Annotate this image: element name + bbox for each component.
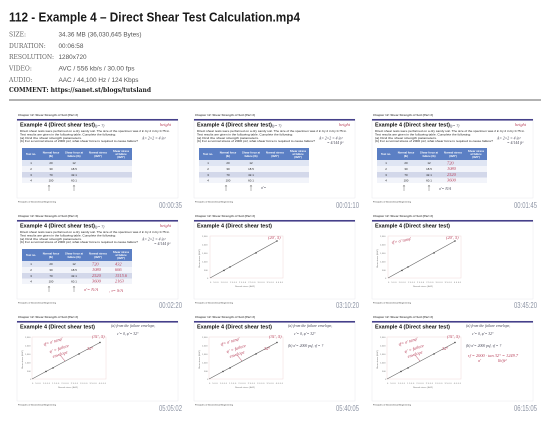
thumbnail 4: completed table: (lb) [49,255,53,259]
thumbnail 8: chart with envelope and part b: 0 500 1000 1500 2000 2500 3000 3500 4000 [209,383,284,385]
thumbnail 3: table with normal stress notes: 18.5 [426,167,432,171]
thumbnail 1: table, blank columns: 00:00:35 [159,201,182,210]
thumbnail 8: chart with envelope and part b: Normal stress (lb/ft²) [235,386,255,389]
thumbnail 1: table, blank columns: (a) Find the shear strength parameters. [20,136,82,140]
thumbnail 8: chart with envelope and part b: 2,000 [202,346,208,348]
thumbnail 4: completed table: 2520 [92,273,102,278]
thumbnail 3: table with normal stress notes: (lb/ft²) [449,154,457,158]
thumbnail 4: completed table: Normal force [43,252,60,256]
thumbnail 5: chart: Chapter 12: Shear Strength of Soil (Part 2) [195,214,255,218]
thumbnail 3: table with normal stress notes: 70 [404,173,408,177]
thumbnail 4: completed table: 42.1 [71,274,77,278]
thumbnail 2: table with first note: 100 [226,178,231,182]
thumbnail 7: chart with envelope: φ' = failure [49,343,69,354]
thumbnail 1: table, blank columns: (γ= ?) [95,124,105,128]
thumbnail 3: table with normal stress notes: 12 [427,161,431,165]
thumbnail 4: completed table: (γ= ?) [95,225,105,229]
thumbnail 3: table with normal stress notes: A= 2×2 = 4 in² [496,136,521,140]
thumbnail 4: completed table: 60.1 [71,280,77,284]
thumbnail 1: table, blank columns: Principles of Geotechnical Engineering [18,200,57,204]
thumbnail 9: chart with final calculation: (a) from the failure envelope, [466,324,510,329]
file metadata: RESOLUTION: [9,54,54,61]
thumbnail 3: table with normal stress notes: σ'= N/A [439,187,452,191]
thumbnail 9: chart with final calculation: c'= 0, φ'= 32° [472,332,494,337]
thumbnail 1: table, blank columns: Normal stress [89,150,107,154]
thumbnail 8: chart with envelope and part b: 1,500 [202,354,208,356]
thumbnail 2: table with first note: Principles of Geotechnical Engineering [195,200,234,204]
thumbnail 4: completed table: height [160,223,172,228]
thumbnail 8: chart with envelope and part b: τf= σ' tanφ' [220,336,240,347]
thumbnail 6: chart: 03:45:20 [514,301,537,310]
thumbnail 2: table with first note: Test results are given in the following table. Complete the following: [197,132,293,136]
thumbnail 8: chart with envelope and part b: Example 4 (Direct shear test) [197,325,272,331]
thumbnail 8: chart with envelope and part b: φ' = failure [226,343,246,354]
thumbnail 2: table with first note: Shear stress [290,149,307,153]
thumbnail 2: table with first note: A= 2×2 = 4 in² [318,136,343,140]
thumbnail 7: chart with envelope: 2,500 [25,337,31,339]
thumbnail 3: table with normal stress notes: 60.1 [426,178,432,182]
thumbnail 4: completed table: Example 4 (Direct shear test) [20,224,95,230]
thumbnail 4: completed table: Shear force at [65,252,83,256]
thumbnail 1: table, blank columns: (lb/ft²) [94,154,102,158]
thumbnail 6: chart: τf= σ' tanφ' [391,236,412,245]
thumbnail 3: table with normal stress notes: (lb) [404,154,408,158]
thumbnail 6: chart: 2,000 [380,244,386,246]
thumbnail 9: chart with final calculation: 0 [385,379,387,381]
thumbnail 6: chart: Shear stress (lb/ft²) [376,249,379,268]
thumbnail 3: table with normal stress notes: Normal force [398,150,415,154]
thumbnail 3: table with normal stress notes: = 4/144 ft² [507,141,524,145]
thumbnail 7: chart with envelope: 05:05:02 [159,404,182,413]
thumbnail 1: table, blank columns: 1 [30,161,32,165]
thumbnail 5: chart: 0 [207,278,209,280]
thumbnail 1: table, blank columns: Shear force at [65,150,83,154]
thumbnail 3: table with normal stress notes: Normal stress [444,150,462,154]
thumbnail 9: chart with final calculation: 2,000 [380,346,386,348]
thumbnail 3: table with normal stress notes: Chapter 12: Shear Strength of Soil (Part 2) [373,113,433,117]
file metadata: 1280x720 [58,54,87,61]
thumbnail 1: table, blank columns [17,113,182,210]
thumbnail 4: completed table: σ'= N/A [84,287,98,292]
thumbnail 3: table with normal stress notes: (b) For a normal stress of 2000 psf, what shear force is required to cause failure? [375,139,493,143]
thumbnail 6: chart: (20', 5) [446,235,459,241]
thumbnail 3: table with normal stress notes: height [515,122,527,127]
thumbnail 7: chart with envelope: 2,000 [25,346,31,348]
thumbnail 6: chart: 0 500 1000 1500 2000 2500 3000 3500 4000 [388,282,462,284]
thumbnail 9: chart with final calculation: (31', 5) [447,334,460,340]
file metadata [8,32,142,84]
thumbnail 1: table, blank columns: Test no. [26,152,36,156]
thumbnail 7: chart with envelope: c'= 0, φ'= 32° [117,332,139,337]
thumbnail 9: chart with final calculation: lb/ft² [498,358,507,363]
thumbnail 2: table with first note: height [339,122,351,127]
thumbnail 3: table with normal stress notes: 1 [385,161,387,165]
thumbnail 9: chart with final calculation: Chapter 12: Shear Strength of Soil (Part 2) [373,315,433,319]
thumbnail 5: chart: 500 [204,270,208,272]
thumbnail 3: table with normal stress notes: 42.1 [426,173,432,177]
thumbnail 8: chart with envelope and part b: c'= 0, φ'= 32° [294,332,316,337]
thumbnail 2: table with first note: at failure [292,152,304,156]
thumbnail 2: table with first note: Normal force [220,150,237,154]
thumbnail 8: chart with envelope and part b: 05:40:05 [336,404,359,413]
thumbnail 2: table with first note: σ'= [261,186,267,190]
thumbnail 6: chart: 0 [385,278,387,280]
file metadata: 00:06:58 [58,43,84,50]
thumbnail 9: chart with final calculation: Shear stress (lb/ft²) [376,350,379,369]
thumbnail 6: chart: 2,500 [380,236,386,238]
thumbnail 9: chart with final calculation: envelope [407,349,423,359]
thumbnail 2: table with first note: 42.1 [248,173,254,177]
thumbnail 8: chart with envelope and part b: 2,500 [202,337,208,339]
thumbnail 3: table with normal stress notes: 20 [404,161,408,165]
thumbnail 4: completed table: A= 2×2 = 4 in² [141,238,166,242]
thumbnail 9: chart with final calculation: 0 500 1000 1500 2000 2500 3000 3500 4000 [387,383,462,385]
thumbnail 3: table with normal stress notes: Shear stress [468,149,485,153]
thumbnail 2: table with first note: 3 [207,173,209,177]
thumbnail 3: table with normal stress notes: Direct shear tests were performed on a dry sandy soil. The size of the specimen was 2 in by 2 in by 0.75 in. [375,129,525,133]
thumbnail 7: chart with envelope: (31', 5) [92,334,105,340]
thumbnail 5: chart: 1,000 [202,262,208,264]
thumbnail 1: table, blank columns: 4 [30,178,32,182]
thumbnail 7: chart with envelope: (a) from the failure envelope, [111,324,155,329]
thumbnail 7: chart with envelope: 32° [87,346,93,351]
thumbnail 3: table with normal stress notes: Test results are given in the following table. Complete the following: [375,132,471,136]
file metadata: AUDIO: [8,77,33,84]
file metadata: AAC / 44,100 Hz / 124 Kbps [58,77,138,84]
thumbnail 2: table with first note [194,113,359,210]
thumbnail 7: chart with envelope: Principles of Geotechnical Engineering [18,404,57,406]
thumbnail 8: chart with envelope and part b: Shear stress (lb/ft²) [198,350,201,369]
thumbnail 1: table, blank columns: (b) For a normal stress of 2000 psf, what shear force is required to cause failure? [20,139,138,143]
thumbnail 1: table, blank columns: Test results are given in the following table. Complete the following: [20,132,116,136]
thumbnail 9: chart with final calculation: 1,000 [380,362,386,364]
thumbnail 7: chart with envelope: Example 4 (Direct shear test) [20,325,95,331]
file metadata: DURATION: [9,43,46,50]
thumbnail 3: table with normal stress notes: 3600 [447,178,457,183]
thumbnail 7: chart with envelope: Chapter 12: Shear Strength of Soil (Part 2) [18,315,78,319]
title: 112 - Example 4 – Direct Shear Test Calculation.mp4 [9,10,301,24]
file metadata: SIZE: [9,32,26,38]
thumbnail 1: table, blank columns: 70 [49,173,53,177]
thumbnail 4: completed table: Test no. [26,253,36,257]
thumbnail 3: table with normal stress notes: failure (lb) [422,154,436,158]
thumbnail 4: completed table: , τ= S/A [109,288,123,294]
thumbnail 4: completed table: 00:02:20 [159,301,182,310]
thumbnail 4: completed table: 1 [30,262,32,266]
thumbnail 1: table, blank columns: Direct shear tests were performed on a dry sandy soil. The size of the specimen was 2 in by 2 in by 0.75 in. [20,129,170,133]
thumbnail 7: chart with envelope: 0 500 1000 1500 2000 2500 3000 3500 4000 [32,383,107,385]
thumbnail 8: chart with envelope and part b: 1,000 [202,362,208,364]
thumbnail 1: table, blank columns: Normal force [43,150,60,154]
thumbnail 4: completed table: 12 [72,262,76,266]
thumbnail 3: table with normal stress notes: 1080 [447,166,457,171]
thumbnail 9: chart with final calculation: σ' [478,358,481,363]
thumbnail 3: table with normal stress notes: Principles of Geotechnical Engineering [373,200,412,204]
thumbnail 1: table, blank columns: 20 [49,161,53,165]
thumbnail 6: chart: 500 [382,270,386,272]
thumbnail 2: table with first note: Test no. [203,152,213,156]
thumbnail 3: table with normal stress notes: 4 [385,178,387,182]
thumbnail 1: table, blank columns: 12 [72,161,76,165]
thumbnail 3: table with normal stress notes: (lb/ft²) [472,155,480,159]
thumbnail 9: chart with final calculation: 1,500 [380,354,386,356]
thumbnail 3: table with normal stress notes: 100 [404,178,409,182]
thumbnail 1: table, blank columns: (lb/ft²) [117,155,125,159]
thumbnail 3: table with normal stress notes: 3 [385,173,387,177]
thumbnail 8: chart with envelope and part b: Principles of Geotechnical Engineering [195,404,234,406]
thumbnail 4: completed table: Normal stress [89,252,107,256]
thumbnail 8: chart with envelope and part b: envelope [229,349,245,359]
thumbnail 9: chart with final calculation: Normal stress (lb/ft²) [413,386,433,389]
thumbnail 1: table, blank columns: Chapter 12: Shear Strength of Soil (Part 2) [18,113,78,117]
thumbnail 4: completed table: 100 [49,280,54,284]
thumbnail 4: completed table: (b) For a normal stress of 2000 psf, what shear force is required to cause failure? [20,240,138,244]
thumbnail 2: table with first note: (lb/ft²) [271,154,279,158]
thumbnail 2: table with first note: (lb/ft²) [294,155,302,159]
thumbnail 7: chart with envelope: 500 [27,371,31,373]
thumbnail 3: table with normal stress notes: Shear force at [420,150,438,154]
thumbnail 9: chart with final calculation: 32° [442,346,448,351]
thumbnail 4: completed table: 1515.6 [115,273,128,278]
thumbnail 4: completed table: 720 [92,261,99,266]
thumbnail 2: table with first note: failure (lb) [244,154,258,158]
thumbnail 9: chart with final calculation: 2,500 [380,337,386,339]
thumbnail 1: table, blank columns: 2 [30,167,32,171]
thumbnail 7: chart with envelope: Normal stress (lb/ft²) [58,386,78,389]
thumbnail 2: table with first note: (b) For a normal stress of 2000 psf, what shear force is required to cause failure? [197,139,315,143]
thumbnail 6: chart: Example 4 (Direct shear test) [375,224,450,230]
thumbnail 2: table with first note: 1 [207,161,209,165]
thumbnail 4: completed table: 1080 [92,267,102,272]
thumbnail 2: table with first note: Example 4 (Direct shear test) [197,123,272,129]
thumbnail 3: table with normal stress notes: (a) Find the shear strength parameters. [375,136,437,140]
thumbnail 4: completed table: 2163 [115,279,125,284]
thumbnail 6: chart: Principles of Geotechnical Engineering [373,302,412,304]
thumbnail 7: chart with envelope: 1,500 [25,354,31,356]
thumbnail 8: chart with envelope and part b: (31', 5) [269,334,282,340]
thumbnail 8: chart with envelope and part b [194,315,359,413]
thumbnail 4: completed table: 70 [49,274,53,278]
thumbnail 5: chart: Shear stress (lb/ft²) [198,249,201,268]
thumbnail 2: table with first note: 2 [207,167,209,171]
comment line: COMMENT: https://sanet.st/blogs/tutsland [9,87,152,94]
thumbnail 2: table with first note: 70 [226,173,230,177]
thumbnail 9: chart with final calculation: Principles of Geotechnical Engineering [373,404,412,406]
file metadata: 34.36 MB (36,030,645 Bytes) [58,32,142,38]
thumbnail 7: chart with envelope: 0 [30,379,32,381]
thumbnail 8: chart with envelope and part b: 500 [204,371,208,373]
thumbnail 4: completed table: 3600 [92,279,102,284]
thumbnail 4: completed table: 3 [30,274,32,278]
thumbnail 6: chart: Normal stress (lb/ft²) [413,285,433,288]
thumbnail 4: completed table [17,214,182,310]
thumbnail 9: chart with final calculation: τf = 2000 · tan 32° = 1249.7 [468,353,519,358]
thumbnail 7: chart with envelope [17,315,182,413]
thumbnail 9: chart with final calculation [372,315,537,413]
thumbnail 1: table, blank columns: 30 [49,167,53,171]
thumbnail 4: completed table: 18.5 [71,268,77,272]
thumbnail 1: table, blank columns: 18.5 [71,167,77,171]
thumbnail 3: table with normal stress notes: 30 [404,167,408,171]
thumbnail 5: chart: 0 500 1000 1500 2000 2500 3000 3500 4000 [210,282,284,284]
thumbnail 8: chart with envelope and part b: 0 [207,379,209,381]
thumbnail 6: chart: Chapter 12: Shear Strength of Soil (Part 2) [373,214,433,218]
thumbnail 5: chart: Example 4 (Direct shear test) [197,224,272,230]
thumbnail 5: chart: Principles of Geotechnical Engineering [195,302,234,304]
thumbnail 5: chart: (20', 5) [268,235,281,241]
thumbnail 3: table with normal stress notes [372,113,537,210]
thumbnail 5: chart: Normal stress (lb/ft²) [235,285,255,288]
thumbnail 8: chart with envelope and part b: Chapter 12: Shear Strength of Soil (Part 2) [195,315,255,319]
thumbnail 1: table, blank columns: 100 [49,178,54,182]
thumbnail 4: completed table: Test results are given in the following table. Complete the following: [20,233,116,237]
thumbnail 2: table with first note: = 4/144 ft² [327,141,344,145]
thumbnail 6: chart: 1,500 [380,253,386,255]
thumbnail 9: chart with final calculation: 500 [382,371,386,373]
thumbnail 6: chart: 1,000 [380,262,386,264]
file metadata: AVC / 556 kb/s / 30.00 fps [58,66,134,72]
thumbnail 4: completed table: 4 [30,280,32,284]
thumbnail 4: completed table: = 4/144 ft² [154,242,171,246]
thumbnail 2: table with first note: Normal stress [266,150,284,154]
thumbnail 4: completed table: 666 [115,267,122,272]
thumbnail 9: chart with final calculation: φ' = failure [404,343,424,354]
thumbnail 8: chart with envelope and part b: (a) from the failure envelope, [288,324,332,329]
thumbnail 2: table with first note: Shear force at [242,150,260,154]
thumbnail 2: table with first note: (a) Find the shear strength parameters. [197,136,259,140]
thumbnail 2: table with first note: 18.5 [248,167,254,171]
thumbnail 2: table with first note: 30 [226,167,230,171]
thumbnail 2: table with first note: (γ= ?) [272,124,282,128]
thumbnail 2: table with first note: 60.1 [248,178,254,182]
thumbnail 4: completed table: Chapter 12: Shear Strength of Soil (Part 2) [18,214,78,218]
thumbnail 4: completed table: 20 [49,262,53,266]
thumbnail 5: chart: 03:10:20 [336,301,359,310]
thumbnail 5: chart: 1,500 [202,253,208,255]
thumbnail 4: completed table: (lb/ft²) [94,255,102,259]
thumbnail 9: chart with final calculation: Example 4 (Direct shear test) [375,325,450,331]
thumbnail 4: completed table: 30 [49,268,53,272]
thumbnail 2: table with first note: 4 [207,178,209,182]
file metadata: VIDEO: [8,66,32,72]
thumbnail 4: completed table: (lb/ft²) [117,256,125,260]
thumbnail 1: table, blank columns: A= 2×2 = 4 in² [141,136,166,140]
thumbnail 8: chart with envelope and part b: 32° [264,346,270,351]
thumbnail 1: table, blank columns: at failure [115,152,127,156]
thumbnail 2: table with first note: (lb) [226,154,230,158]
thumbnail 5: chart: 2,500 [202,236,208,238]
thumbnail 7: chart with envelope: 1,000 [25,362,31,364]
thumbnail 4: completed table: 2 [30,268,32,272]
thumbnail 4: completed table: (a) Find the shear strength parameters. [20,237,82,241]
thumbnail 1: table, blank columns: Shear stress [113,149,130,153]
thumbnail 1: table, blank columns: (lb) [49,154,53,158]
thumbnail 3: table with normal stress notes: Test no. [381,152,391,156]
thumbnail 7: chart with envelope: τf= σ' tanφ' [43,336,63,347]
thumbnail 3: table with normal stress notes: 00:01:45 [514,201,537,210]
thumbnail 5: chart [194,214,359,310]
thumbnail 2: table with first note: Chapter 12: Shear Strength of Soil (Part 2) [195,113,255,117]
thumbnail 1: table, blank columns: Example 4 (Direct shear test) [20,123,95,129]
thumbnail 3: table with normal stress notes: at failure [470,152,482,156]
thumbnail 2: table with first note: Direct shear tests were performed on a dry sandy soil. The size of the specimen was 2 in by 2 in by 0.75 in. [197,129,347,133]
thumbnail 3: table with normal stress notes: 720 [447,160,454,165]
thumbnail 4: completed table: at failure [115,253,127,257]
thumbnail 6: chart [372,214,537,310]
thumbnail 3: table with normal stress notes: (γ= ?) [450,124,460,128]
thumbnail 2: table with first note: 00:01:10 [336,201,359,210]
thumbnail 9: chart with final calculation: (b) σ'= 2000 psf, τf = ? [466,344,501,349]
thumbnail 4: completed table: Principles of Geotechnical Engineering [18,302,57,304]
thumbnail 8: chart with envelope and part b: (b) σ'= 2000 psf, τf = ? [288,344,323,349]
thumbnail 7: chart with envelope: envelope [52,349,68,359]
thumbnail 1: table, blank columns: failure (lb) [68,154,81,158]
thumbnail 2: table with first note: 20 [226,161,230,165]
thumbnail 1: table, blank columns: 3 [30,173,32,177]
thumbnail 9: chart with final calculation: 06:15:05 [514,404,537,413]
thumbnail 4: completed table: 432 [115,261,122,266]
thumbnail 5: chart: 2,000 [202,244,208,246]
thumbnail 1: table, blank columns: 60.1 [71,178,77,182]
thumbnail 7: chart with envelope: Shear stress (lb/ft²) [21,350,24,369]
thumbnail 3: table with normal stress notes: 2 [385,167,387,171]
thumbnail 4: completed table: Direct shear tests were performed on a dry sandy soil. The size of the specimen was 2 in by 2 in by 0.75 in. [20,230,170,234]
thumbnail 4: completed table: failure (lb) [68,255,81,259]
thumbnail 3: table with normal stress notes: 2520 [447,172,457,177]
thumbnail 1: table, blank columns: 42.1 [71,173,77,177]
thumbnail 1: table, blank columns: height [160,122,172,127]
thumbnail 9: chart with final calculation: τf= σ' tanφ' [398,336,418,347]
thumbnail 3: table with normal stress notes: Example 4 (Direct shear test) [375,123,450,129]
thumbnail 2: table with first note: 12 [249,161,253,165]
thumbnail 4: completed table: Shear stress [113,250,130,254]
